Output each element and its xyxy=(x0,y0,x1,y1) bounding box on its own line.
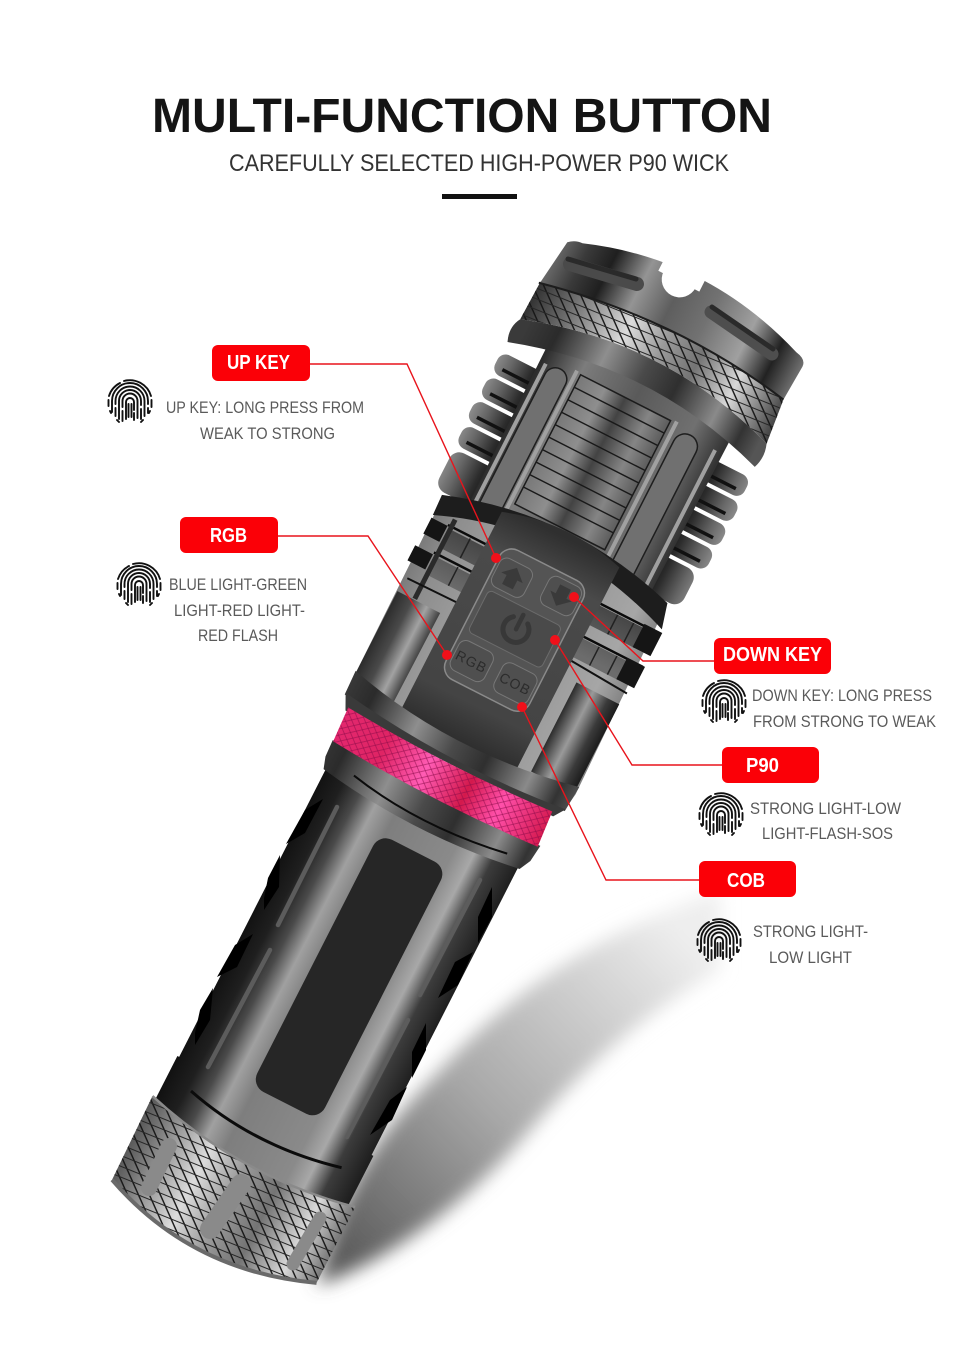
barrel cutouts xyxy=(195,799,492,1135)
barrel neck xyxy=(315,740,540,881)
callout lines xyxy=(278,364,722,880)
head fins xyxy=(432,351,753,615)
callout: p90: P90 xyxy=(746,755,779,777)
callout: up key: WEAK TO STRONG xyxy=(200,424,335,443)
callout: rgb: BLUE LIGHT-GREEN xyxy=(169,575,307,594)
COB button: COB xyxy=(497,669,534,698)
RGB button xyxy=(447,638,496,684)
collar left slots xyxy=(393,509,496,620)
callout: p90: LIGHT-FLASH-SOS xyxy=(762,824,893,843)
tail knurl xyxy=(100,1096,358,1304)
callout: p90 xyxy=(700,747,901,843)
button collar xyxy=(336,473,684,819)
lower right pillar xyxy=(531,682,619,793)
up key button xyxy=(489,555,535,600)
collar base xyxy=(338,693,567,820)
callout: rgb: RGB xyxy=(210,525,247,547)
barrel slits xyxy=(208,807,480,1137)
collar top chamfer xyxy=(432,474,682,631)
callout: cob: COB xyxy=(727,870,765,892)
barrel xyxy=(132,693,567,1225)
down key button xyxy=(538,574,584,618)
knurled ring xyxy=(520,267,793,445)
callout: down key: DOWN KEY xyxy=(723,644,823,666)
dark center column xyxy=(396,501,623,779)
icon: fingerprint rgb xyxy=(118,563,160,605)
callout: rgb xyxy=(118,517,307,645)
COB button xyxy=(491,660,540,707)
barrel window xyxy=(251,833,447,1120)
flashlight shadow xyxy=(318,890,720,1285)
right pill xyxy=(598,430,702,601)
tail grip pills xyxy=(149,1146,320,1264)
pink knurled ring xyxy=(329,708,555,850)
callout: cob xyxy=(698,861,868,967)
callout: down key: FROM STRONG TO WEAK xyxy=(753,712,937,731)
icon: fingerprint up key xyxy=(108,380,152,422)
callout: up key: UP KEY xyxy=(227,352,291,374)
callout dots xyxy=(442,553,579,712)
icon: fingerprint cob xyxy=(698,919,740,961)
collar lower band xyxy=(339,671,580,818)
title underline xyxy=(442,194,517,199)
tail band xyxy=(148,1056,373,1214)
callout: cob: STRONG LIGHT- xyxy=(753,922,868,941)
left pill xyxy=(469,364,571,535)
callout: p90: STRONG LIGHT-LOW xyxy=(750,799,901,818)
lower left pillar xyxy=(352,591,440,702)
retaining ring xyxy=(505,296,779,469)
callout: up key: UP KEY: LONG PRESS FROM xyxy=(166,398,364,417)
collar right slots xyxy=(565,599,662,695)
subtitle: CAREFULLY SELECTED HIGH-POWER P90 WICK xyxy=(229,150,729,177)
head cap xyxy=(539,187,831,407)
title: MULTI-FUNCTION BUTTON xyxy=(152,90,772,143)
icon: fingerprint down key xyxy=(702,680,746,722)
cap slots xyxy=(570,264,637,284)
callout: cob: LOW LIGHT xyxy=(769,948,852,967)
callout: rgb: RED FLASH xyxy=(198,626,278,645)
power button xyxy=(468,590,562,669)
callout: down key xyxy=(702,638,937,731)
RGB button: RGB xyxy=(453,647,490,676)
icon: fingerprint p90 xyxy=(700,793,742,835)
head body xyxy=(458,333,737,614)
callout: down key: DOWN KEY: LONG PRESS xyxy=(752,686,932,705)
flashlight xyxy=(86,186,837,1310)
button panel xyxy=(440,544,589,716)
callout: up key xyxy=(108,345,364,443)
callout: rgb: LIGHT-RED LIGHT- xyxy=(174,601,305,620)
center plate xyxy=(515,375,671,550)
